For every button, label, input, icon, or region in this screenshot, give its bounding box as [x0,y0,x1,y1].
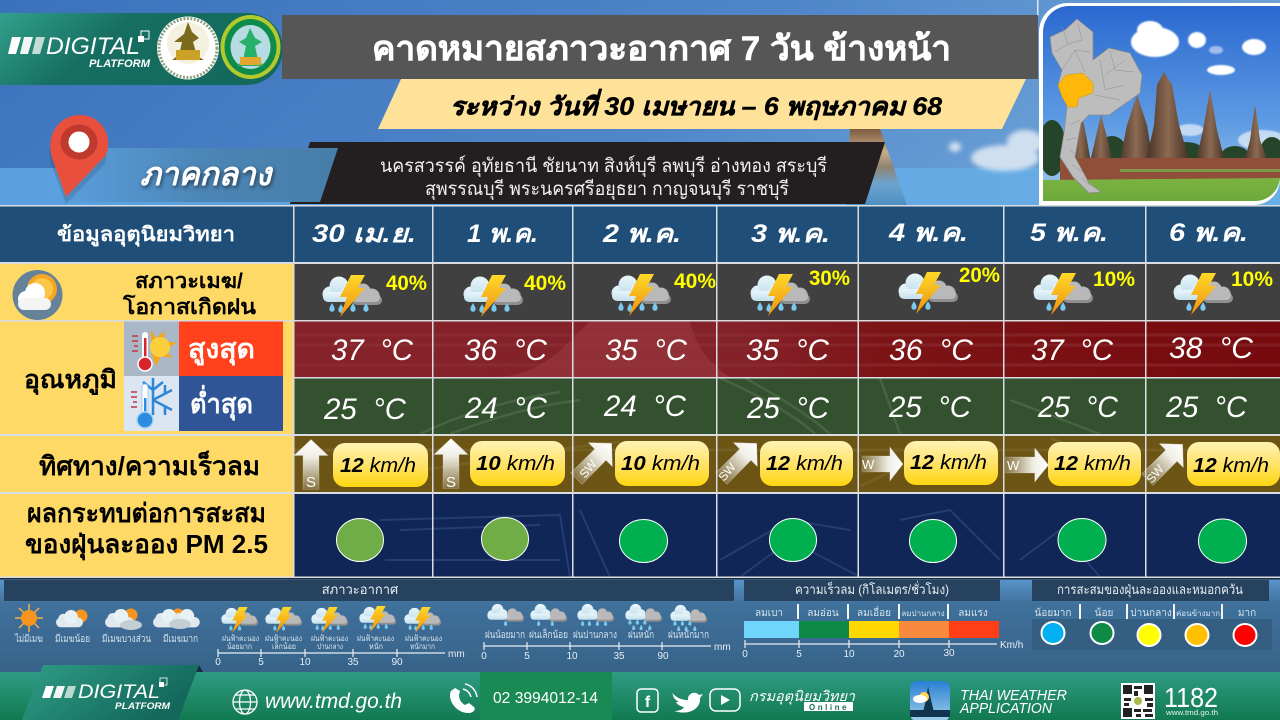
rain chance day 1: 40% [386,272,427,295]
temperature labels [24,321,283,431]
rain chance day 4: 30% [809,267,850,290]
icon: globe [233,690,257,714]
trees [1038,120,1280,176]
wind class labels: ลมอ่อน [807,608,839,619]
wind day 2 [434,438,565,491]
icon: youtube [710,689,740,711]
wind day 1: S [306,474,316,491]
icon: few clouds [55,610,90,645]
storm icon day 3 [612,274,671,316]
rain scale [481,642,731,662]
seal: digital economy ministry [157,16,219,80]
storm rainfall scale: 10 [299,657,311,668]
department online: กรมอุตุนิยมวิทยา [749,688,856,705]
wind scale [742,640,1023,660]
dust legend heading: การสะสมของฝุ่นละอองและหมอกควัน [1057,582,1243,598]
wind scale: 20 [893,649,905,660]
table: wind row [39,431,1280,492]
rain legend labels: ฝนน้อยมาก [485,629,525,641]
high temp day 7: 38 °C [1169,332,1253,365]
storm rainfall scale: 0 [215,657,221,668]
storm legend labels: ฝนฟ้าคะนอง [311,634,348,643]
row label: temperature: อุณหภูมิ [24,366,117,396]
icon: phone [450,684,477,713]
wind day 6: W [1007,458,1020,473]
wind scale: 5 [796,649,802,660]
weather legend heading: สภาวะอากาศ [322,582,399,597]
date: 6 May: 6 พ.ค. [1169,219,1248,247]
icon: location pin [50,115,108,204]
low temp day 3: 24 °C [603,390,686,423]
app name [959,687,1067,717]
phone number: 02 3994012-14 [493,690,598,707]
logo: digital platform: DIGITAL [46,33,140,60]
department online [749,688,856,712]
wind class labels: ลมปานกลาง [901,609,945,618]
title bar [282,15,1038,79]
date: 4 May: 4 พ.ค. [888,219,968,247]
rain chance day 2: 40% [524,272,566,295]
rain legend labels: ฝนหนักมาก [668,630,709,641]
wind day 2: 10 km/h [476,453,555,475]
legend panel [0,578,1280,672]
hotline 1182: www.tmd.go.th [1165,710,1218,717]
wind class labels: ลมเบา [755,608,783,619]
date: 30 Apr: 30 เม.ย. [312,220,416,248]
high temperature label [179,321,283,376]
rain legend labels [485,627,709,641]
dust level day 3 [620,520,668,562]
rain chance day 6: 10% [1093,268,1135,291]
wind day 5: 12 km/h [910,452,987,474]
wind day 3 [564,431,709,491]
high temp day 4: 35 °C [746,334,829,367]
wind day 7: SW [1144,462,1167,486]
table: temperature minimum row [294,378,1280,434]
rain scale: 0 [481,651,487,662]
logo: digital platform: PLATFORM [89,58,151,70]
table: temperature maximum row [294,321,1280,377]
dust class labels: ปานกลาง [1130,608,1172,619]
high temperature label: สูงสุด [188,334,255,366]
footer logo: PLATFORM [115,701,171,711]
dust class labels: มาก [1238,608,1256,619]
rain scale: mm [714,642,731,653]
department online: Online [809,703,849,712]
date: 5 May: 5 พ.ค. [1030,219,1108,247]
wind day 3: 10 km/h [621,453,700,475]
storm legend labels [222,634,442,651]
icon: twitter [672,693,703,713]
low temp day 5: 25 °C [888,391,971,424]
high temp day 2: 36 °C [464,334,547,367]
region banner: central [60,148,338,202]
icon: thai weather app [910,681,950,720]
rain scale: 90 [657,651,669,662]
table: left label column [0,264,293,577]
website: www.tmd.go.th [265,690,402,713]
storm legend labels: ปานกลาง [317,642,343,651]
date: 3 May: 3 พ.ค. [751,220,830,248]
wind day 6 [1006,442,1141,486]
region banner: provinces: สุพรรณบุรี พระนครศรีอยุธยา กาญจนบุรี ราชบุรี [425,178,789,201]
footer logo: DIGITAL [78,682,160,703]
storm icon day 2 [464,275,523,317]
storm legend labels: ฝนฟ้าคะนอง [357,634,394,643]
icon: few clouds: มีเมฆน้อย [55,633,90,645]
table: header row [0,206,1280,262]
row label: sky and rain chance: สภาวะเมฆ/ [135,270,243,293]
wind day 5: W [862,457,875,472]
legend: dust accumulation [1032,580,1272,650]
icon: cold thermometer [124,376,179,431]
dust class labels: น้อย [1095,607,1113,619]
dust level high [1234,624,1256,646]
low temp day 6: 25 °C [1037,391,1118,424]
storm rainfall scale: 35 [347,657,359,668]
digital platform logo bar [0,13,283,85]
date: 2 May: 2 พ.ค. [602,220,681,248]
photo panel: temple and map [1038,3,1280,205]
seal: meteorological department [220,15,280,79]
storm legend labels: หนัก [369,642,383,651]
dust level low [1090,622,1114,644]
low temperature label: ต่ำสุด [190,384,253,421]
high temp day 5: 36 °C [889,334,973,367]
app name: THAI WEATHER [960,687,1067,704]
dust level day 1 [336,518,384,562]
logo: digital platform [8,31,151,70]
wind day 1: 12 km/h [340,455,416,477]
low temperature label [179,376,283,431]
icon: clear sky [14,604,43,645]
icon: facebook [637,689,658,712]
wind day 5 [862,441,998,485]
title bar: คาดหมายสภาวะอากาศ 7 วัน ข้างหน้า [372,30,951,68]
dust level very low [1042,622,1064,644]
icon: mostly cloudy [153,608,200,645]
high temp day 6: 37 °C [1031,334,1113,367]
wind class labels: ลมเอื่อย [857,605,891,619]
legend: wind speed [742,580,1023,660]
dust level day 7 [1198,519,1246,563]
storm rainfall scale: 5 [258,657,264,668]
region banner: central: ภาคกลาง [140,156,273,192]
rain scale: 35 [613,651,625,662]
table grid lines [0,205,1280,578]
rain chance day 7: 10% [1231,268,1273,291]
wind day 7: 12 km/h [1193,455,1269,477]
table: sky condition row [12,264,1280,320]
storm rainfall scale: mm [448,649,465,660]
icon: clear sky: ไม่มีเมฆ [14,633,43,645]
hotline 1182: 1182 [1164,682,1218,713]
rain legend labels: ฝนหนัก [628,630,654,641]
row label: wind: ทิศทาง/ความเร็วลม [39,450,260,481]
wind day 4: SW [716,460,739,484]
wind day 4: 12 km/h [766,453,843,475]
region banner: provinces: นครสวรรค์ อุทัยธานี ชัยนาท สิงห์บุรี ลพบุรี อ่างทอง สระบุรี [380,155,827,178]
dust level day 6 [1058,518,1106,562]
dust level day 4 [770,518,816,562]
rain legend icons [487,604,707,631]
storm icon day 7 [1174,273,1233,315]
storm rainfall scale: 90 [391,657,403,668]
wind day 6: 12 km/h [1054,453,1131,475]
icon: hot thermometer [124,321,179,376]
wind day 1 [294,440,428,491]
dust level fairly high [1186,624,1208,646]
wind scale: 30 [943,648,955,659]
wind class labels [755,605,988,619]
date range banner [378,79,1026,129]
map of Thailand [1050,19,1142,193]
footer logo [22,665,203,720]
app name: APPLICATION [959,700,1052,717]
storm rainfall scale [215,649,465,668]
low temp day 4: 25 °C [746,392,829,425]
footer bar [0,665,1280,720]
legend: weather conditions [4,580,734,668]
icon: mostly cloudy: มีเมฆมาก [163,633,198,645]
dust class labels [1035,607,1256,619]
storm icon day 5 [898,272,958,314]
wind class labels: ลมแรง [958,608,988,619]
dust level moderate [1138,624,1160,646]
QR code [1121,683,1155,719]
storm legend labels: ฝนฟ้าคะนอง [405,634,442,643]
rain legend labels: ฝนเล็กน้อย [529,627,568,641]
high temp day 3: 35 °C [605,334,687,367]
icon: partly cloudy [102,608,151,645]
storm icon day 4 [750,274,810,316]
storm legend labels: เล็กน้อย [272,641,296,651]
wind legend heading: ความเร็วลม (กิโลเมตร/ชั่วโมง) [795,580,949,597]
storm legend labels: ฝนฟ้าคะนอง [265,634,302,643]
dust level day 5 [910,520,956,562]
rain scale: 10 [566,651,578,662]
background sky [0,0,1280,206]
rain chance day 5: 20% [959,264,1000,287]
low temp day 2: 24 °C [464,392,547,425]
rain chance day 3: 40% [674,270,716,293]
wind scale: 0 [742,649,748,660]
storm legend labels: ฝนฟ้าคะนอง [222,634,259,643]
dust class labels: ค่อนข้างมาก [1176,609,1220,618]
row label: PM 2.5 impact [25,498,268,561]
table: PM 2.5 row [25,494,1280,577]
wind day 7 [1135,432,1280,492]
wind day 2: S [446,474,456,491]
rain legend labels: ฝนปานกลาง [573,630,617,641]
storm legend labels: น้อยมาก [227,642,252,651]
storm icon day 1 [322,275,382,317]
wind scale: Km/h [1000,640,1023,651]
phone number [480,672,612,720]
wind day 4 [709,431,853,491]
low temp day 7: 25 °C [1165,391,1247,424]
dust class labels: น้อยมาก [1035,607,1071,619]
icon: sun and cloud [12,270,62,320]
icon: facebook: f [645,694,651,711]
header label: ข้อมูลอุตุนิยมวิทยา [57,223,235,248]
high temp day 1: 37 °C [331,334,413,367]
rain scale: 5 [524,651,530,662]
region banner: provinces [290,142,885,204]
wind speed color bar [744,621,999,638]
wind day 3: SW [577,457,600,481]
low temp day 1: 25 °C [323,393,406,426]
dust level day 2 [482,518,528,560]
storm legend labels: หนักมาก [410,642,435,651]
icon: partly cloudy: มีเมฆบางส่วน [102,633,151,645]
date: 1 May: 1 พ.ค. [467,220,538,248]
storm legend icons [221,606,441,633]
row label: sky and rain chance: โอกาสเกิดฝน [122,294,257,319]
row label: PM 2.5 impact: ผลกระทบต่อการสะสม [27,498,266,528]
row label: PM 2.5 impact: ของฝุ่นละออง PM 2.5 [25,529,268,561]
date range banner: ระหว่าง วันที่ 30 เมษายน – 6 พฤษภาคม 68 [450,88,942,121]
storm icon day 6 [1034,273,1093,315]
photo clouds [1112,21,1280,150]
row label: sky and rain chance [122,270,257,319]
wind scale: 10 [843,649,855,660]
prangs [1075,72,1266,158]
